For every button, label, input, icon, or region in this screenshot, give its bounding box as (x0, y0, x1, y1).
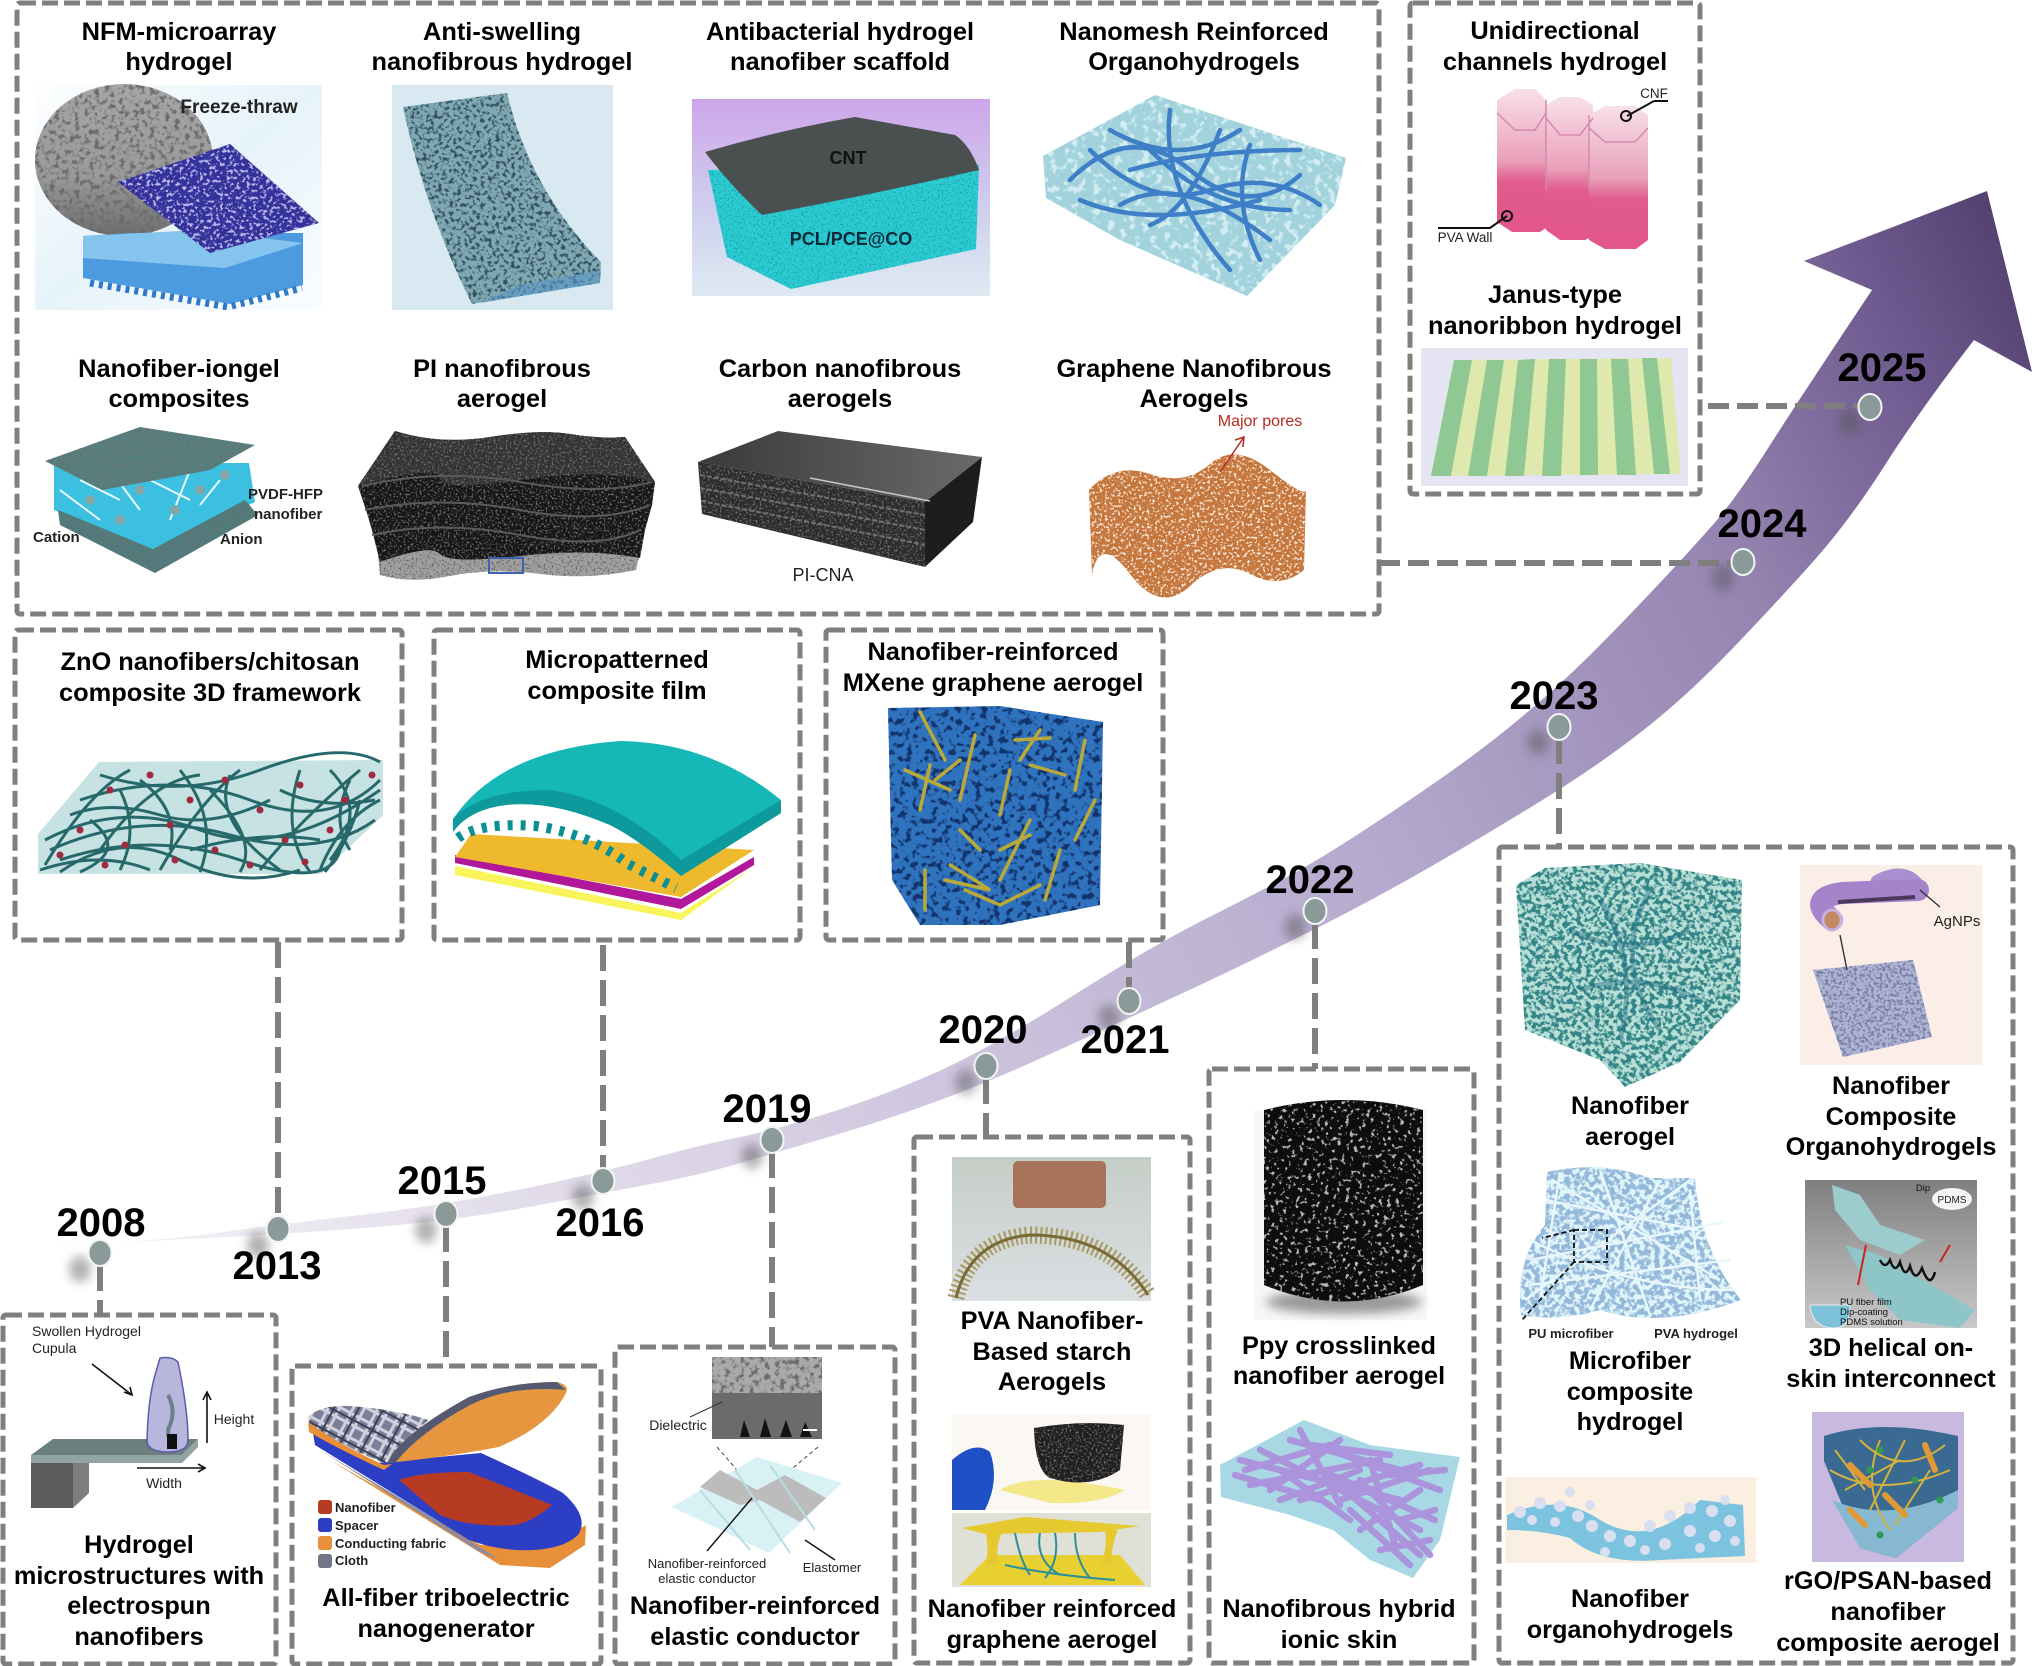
image: cantilever hydrogel cupula: Height (214, 1411, 254, 1427)
image: Antibacterial hydrogel nanofiber scaffold (692, 99, 990, 296)
image: Nanofiber-iongel composites: Cation (33, 529, 80, 546)
panel: 2022 Ppy aerogel and ionic skin (1209, 1069, 1474, 1663)
caption: Hydrogel microstructures with electrospun nanofibers: microstructures with (14, 1562, 264, 1590)
heading: Graphene Nanofibrous Aerogels: Aerogels (1140, 385, 1248, 413)
image: graphene aerogel photo (952, 1414, 1151, 1510)
image: Anti-swelling nanofibrous hydrogel (392, 85, 613, 310)
image: Nanofiber-iongel composites: Anion (220, 531, 262, 548)
heading: Nanofiber-iongel composites: composites (108, 385, 250, 413)
caption: Hydrogel microstructures with electrospun nanofibers: electrospun (67, 1592, 211, 1620)
image: Nanomesh Reinforced Organohydrogels (1043, 95, 1346, 296)
image: all-fiber shoe insole: Cloth (335, 1553, 368, 1568)
heading: Nanomesh Reinforced Organohydrogels: Organohydrogels (1088, 48, 1300, 76)
image: cantilever hydrogel cupula: Swollen Hydrogel (32, 1323, 141, 1339)
image: Graphene Nanofibrous Aerogels (1089, 413, 1306, 598)
caption: Nanofibrous hybrid ionic skin: ionic skin (1281, 1626, 1397, 1654)
image: microfiber composite hydrogel: PU microfiber (1528, 1326, 1614, 1341)
image: all-fiber shoe insole (308, 1382, 586, 1568)
caption: 3D helical on-skin interconnect: 3D helical on- (1809, 1334, 1973, 1362)
image: MXene graphene aerogel (888, 706, 1103, 925)
image: aerogel on wheat photo (952, 1157, 1151, 1301)
caption: Nanofiber organohydrogels: Nanofiber (1571, 1585, 1689, 1613)
heading: Carbon nanofibrous aerogels: aerogels (788, 385, 892, 413)
heading: Graphene Nanofibrous Aerogels: Graphene Nanofibrous (1056, 355, 1332, 383)
image: Antibacterial hydrogel nanofiber scaffold: PCL/PCE@CO (790, 229, 912, 249)
heading: Unidirectional channels hydrogel: Unidirectional (1470, 17, 1640, 45)
image: 3D helical on-skin interconnect: Dip (1916, 1183, 1930, 1194)
image: NFM-microarray hydrogel: Freeze-thraw (180, 97, 298, 118)
image: nanofiber organohydrogels (1505, 1477, 1756, 1563)
panel: 2023 materials (1499, 847, 2013, 1663)
year labels: 2008 (57, 1201, 145, 1245)
year labels: 2019 (723, 1087, 811, 1131)
heading: PI nanofibrous aerogel: PI nanofibrous (413, 355, 591, 383)
panel: 2016 micropatterned film (434, 630, 800, 940)
caption: rGO/PSAN-based nanofiber composite aerogel: nanofiber (1830, 1598, 1946, 1626)
image: cantilever hydrogel cupula: Cupula (32, 1340, 77, 1356)
panel: 2013 ZnO framework (15, 630, 402, 940)
caption: Nanofiber reinforced graphene aerogel: graphene aerogel (947, 1626, 1157, 1654)
heading: Nanomesh Reinforced Organohydrogels: Nanomesh Reinforced (1059, 18, 1329, 46)
panel: 2015 triboelectric nanogenerator (292, 1366, 601, 1664)
year labels (57, 346, 1926, 1288)
image: Antibacterial hydrogel nanofiber scaffold: CNT (830, 148, 866, 168)
caption: Microfiber composite hydrogel: Microfiber (1569, 1347, 1691, 1375)
image: nanofibrous hybrid ionic skin (1220, 1420, 1460, 1578)
image: Carbon nanofibrous aerogels (698, 431, 982, 585)
image: Nanofiber-iongel composites: PVDF-HFP (248, 486, 323, 503)
image: nanofiber composite with AgNPs: AgNPs (1934, 913, 1980, 930)
heading: PI nanofibrous aerogel: aerogel (457, 385, 547, 413)
heading: Micropatterned composite film: Micropatterned (525, 646, 709, 674)
image: PI nanofibrous aerogel (358, 431, 655, 580)
caption: Ppy crosslinked nanofiber aerogel: Ppy crosslinked (1242, 1332, 1436, 1360)
caption: PVA Nanofiber-Based starch Aerogels: Aerogels (998, 1368, 1106, 1396)
image: Carbon nanofibrous aerogels: PI-CNA (792, 565, 854, 585)
caption: PVA Nanofiber-Based starch Aerogels: Based starch (973, 1338, 1131, 1366)
image: Graphene Nanofibrous Aerogels: Major pores (1218, 413, 1302, 430)
caption: Nanofiber Composite Organohydrogels: Composite (1826, 1103, 1956, 1131)
image: Unidirectional channels hydrogel (1438, 86, 1668, 249)
image: graphene aerogel diagram (952, 1513, 1151, 1587)
caption: Ppy crosslinked nanofiber aerogel: nanofiber aerogel (1233, 1362, 1445, 1390)
caption: Nanofiber reinforced graphene aerogel: Nanofiber reinforced (928, 1595, 1176, 1623)
caption: rGO/PSAN-based nanofiber composite aerogel: rGO/PSAN-based (1784, 1567, 1992, 1595)
caption: Hydrogel microstructures with electrospun nanofibers: Hydrogel (84, 1531, 194, 1559)
image: elastic conductor structure: Dielectric (649, 1417, 707, 1433)
caption: All-fiber triboelectric nanogenerator: nanogenerator (357, 1615, 535, 1643)
heading: Anti-swelling nanofibrous hydrogel: nanofibrous hydrogel (372, 48, 632, 76)
caption: All-fiber triboelectric nanogenerator: All-fiber triboelectric (322, 1584, 570, 1612)
image: cantilever hydrogel cupula: Width (146, 1475, 182, 1491)
caption: Nanofiber aerogel: aerogel (1585, 1123, 1675, 1151)
panel: 2008 hydrogel microstructures (3, 1315, 276, 1664)
image: NFM-microarray hydrogel (35, 84, 322, 310)
heading: Carbon nanofibrous aerogels: Carbon nanofibrous (719, 355, 961, 383)
heading: Antibacterial hydrogel nanofiber scaffold: Antibacterial hydrogel (706, 18, 974, 46)
image: 3D helical on-skin interconnect: PDMS solution (1840, 1317, 1903, 1328)
image: elastic conductor structure: elastic conductor (658, 1571, 756, 1586)
image: nanofiber aerogel (1516, 863, 1742, 1087)
year labels: 2022 (1266, 858, 1354, 902)
image: Nanofiber-iongel composites (33, 427, 323, 573)
image: rGO/PSAN nanofiber composite aerogel (1812, 1412, 1964, 1562)
heading: Antibacterial hydrogel nanofiber scaffold: nanofiber scaffold (730, 48, 950, 76)
heading: ZnO nanofibers/chitosan composite 3D framework: composite 3D framework (59, 679, 362, 707)
panel: 2021 MXene graphene aerogel (826, 630, 1163, 940)
image: Unidirectional channels hydrogel: PVA Wall (1438, 230, 1492, 245)
year labels: 2016 (556, 1201, 644, 1245)
caption: Nanofiber Composite Organohydrogels: Nanofiber (1832, 1072, 1950, 1100)
caption: Nanofiber aerogel: Nanofiber (1571, 1092, 1689, 1120)
image: all-fiber shoe insole: Spacer (335, 1518, 378, 1533)
year labels: 2020 (939, 1008, 1027, 1052)
heading: Micropatterned composite film: composite film (527, 677, 707, 705)
image: microfiber composite hydrogel: PVA hydrogel (1654, 1326, 1738, 1341)
image: 3D helical on-skin interconnect: PU fiber film (1840, 1297, 1892, 1308)
image: Micropatterned composite film (453, 741, 781, 920)
year labels: 2013 (233, 1244, 321, 1288)
connector lines between years and panels (100, 406, 1858, 1366)
timeline arrow (36, 191, 2032, 1247)
heading: ZnO nanofibers/chitosan composite 3D framework: ZnO nanofibers/chitosan (60, 648, 360, 676)
caption: Hydrogel microstructures with electrospun nanofibers: nanofibers (74, 1623, 204, 1651)
image: Janus-type nanoribbon hydrogel (1421, 348, 1688, 486)
year labels: 2015 (398, 1159, 486, 1203)
caption: Nanofiber organohydrogels: organohydrogels (1527, 1616, 1733, 1644)
heading: Nanofiber-iongel composites: Nanofiber-iongel (78, 355, 280, 383)
caption: Microfiber composite hydrogel: composite (1567, 1378, 1693, 1406)
caption: rGO/PSAN-based nanofiber composite aerogel: composite aerogel (1776, 1629, 2000, 1657)
timeline marker dots (69, 394, 1882, 1282)
image: ZnO framework (38, 753, 383, 878)
panel: 2024 materials (17, 3, 1379, 614)
image: Unidirectional channels hydrogel: CNF (1640, 86, 1668, 101)
caption: Nanofiber-reinforced elastic conductor: Nanofiber-reinforced (630, 1592, 880, 1620)
image: all-fiber shoe insole: Nanofiber (335, 1500, 396, 1515)
caption: Nanofibrous hybrid ionic skin: Nanofibrous hybrid (1222, 1595, 1456, 1623)
image: 3D helical on-skin interconnect (1805, 1180, 1977, 1328)
heading: NFM-microarray hydrogel: hydrogel (125, 48, 233, 76)
year labels: 2023 (1510, 674, 1598, 718)
caption: PVA Nanofiber-Based starch Aerogels: PVA Nanofiber- (961, 1307, 1143, 1335)
panel: 2019 elastic conductor (615, 1347, 895, 1664)
caption: Nanofiber Composite Organohydrogels: Organohydrogels (1786, 1133, 1996, 1161)
heading: Nanofiber-reinforced MXene graphene aerogel: Nanofiber-reinforced (867, 638, 1119, 666)
heading: Anti-swelling nanofibrous hydrogel: Anti-swelling (423, 18, 581, 46)
image: Ppy crosslinked aerogel cylinder (1254, 1100, 1427, 1320)
image: elastic conductor structure (648, 1357, 862, 1586)
heading: Unidirectional channels hydrogel: channels hydrogel (1443, 48, 1667, 76)
year labels: 2025 (1838, 346, 1926, 390)
image: cantilever hydrogel cupula (31, 1323, 254, 1508)
heading: NFM-microarray hydrogel: NFM-microarray (82, 18, 276, 46)
image: elastic conductor structure: Elastomer (803, 1560, 862, 1575)
image: Nanofiber-iongel composites: nanofiber (254, 506, 322, 523)
image: 3D helical on-skin interconnect: PDMS (1938, 1195, 1967, 1206)
year labels: 2024 (1718, 502, 1807, 546)
image: elastic conductor structure: Nanofiber-reinforced (648, 1556, 766, 1571)
heading: Nanofiber-reinforced MXene graphene aerogel: MXene graphene aerogel (843, 669, 1143, 697)
caption: Nanofiber-reinforced elastic conductor: elastic conductor (650, 1623, 860, 1651)
image: all-fiber shoe insole: Conducting fabric (335, 1536, 446, 1551)
year labels: 2021 (1081, 1018, 1169, 1062)
image: nanofiber composite with AgNPs (1800, 865, 1982, 1065)
image: 3D helical on-skin interconnect: Dip-coating (1840, 1307, 1888, 1318)
heading: Janus-type nanoribbon hydrogel: nanoribbon hydrogel (1428, 312, 1682, 340)
caption: Microfiber composite hydrogel: hydrogel (1577, 1408, 1683, 1436)
heading: Janus-type nanoribbon hydrogel: Janus-type (1488, 281, 1622, 309)
panel: 2020 starch and graphene aerogels (914, 1137, 1190, 1663)
image: microfiber composite hydrogel (1520, 1167, 1741, 1341)
caption: 3D helical on-skin interconnect: skin interconnect (1786, 1365, 1996, 1393)
panel: 2025 materials (1410, 3, 1700, 494)
